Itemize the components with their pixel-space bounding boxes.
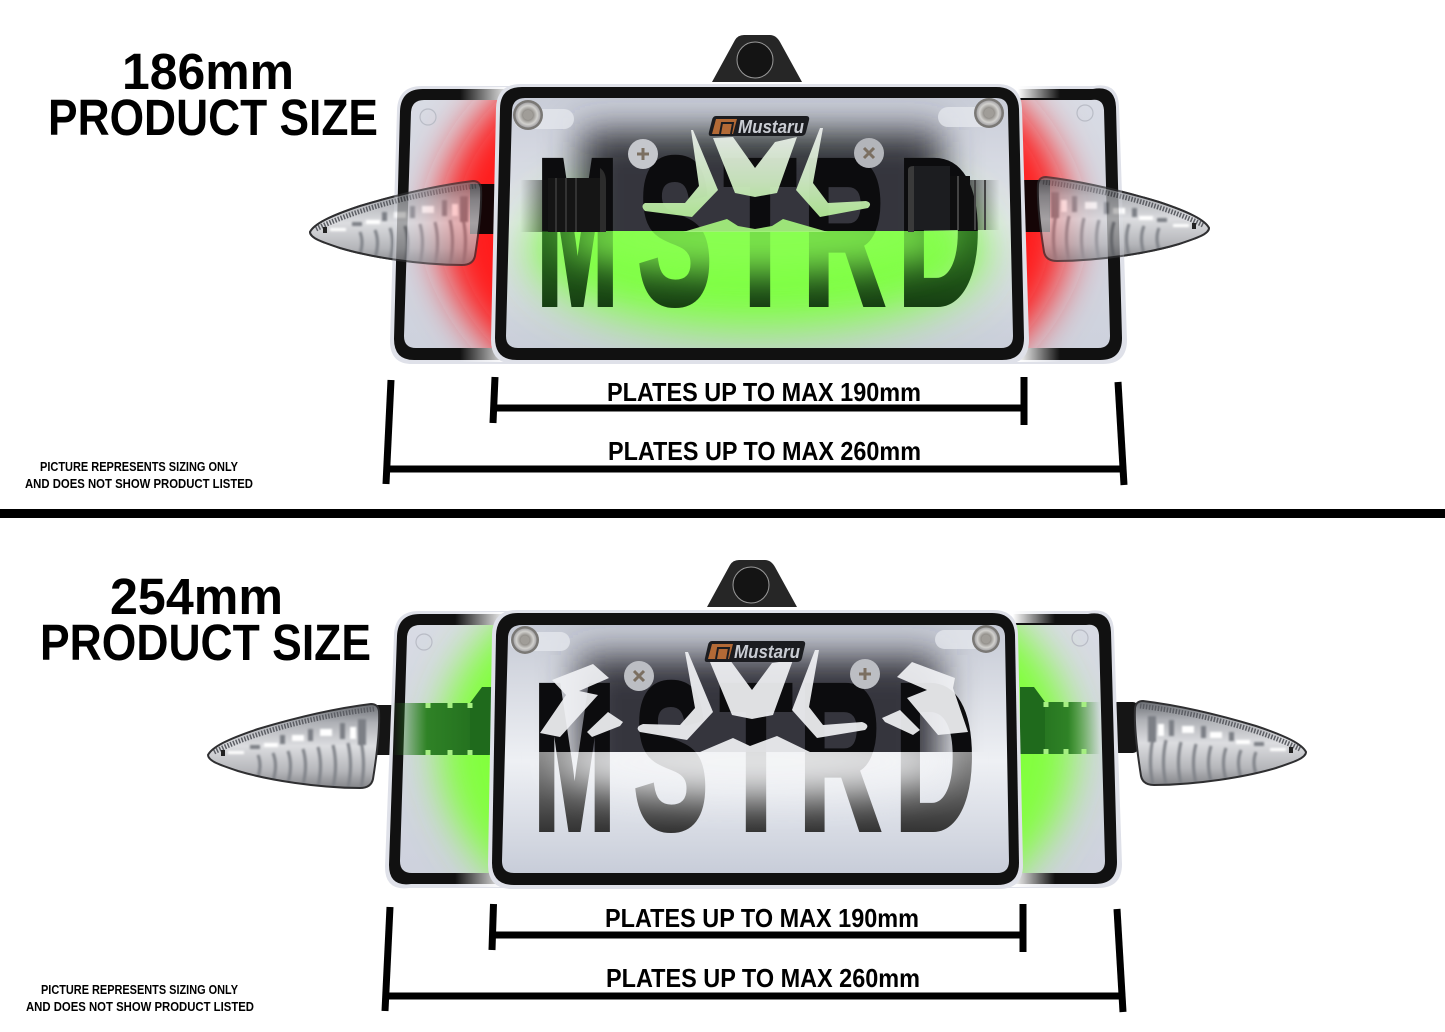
right bracket and grommet	[908, 166, 1000, 232]
MSTRD plate lettering: T	[724, 117, 796, 349]
heading: 254mm product size: 254mm	[110, 568, 283, 625]
MSTRD plate lettering: M	[537, 117, 618, 349]
MSTRD plate lettering: T	[720, 642, 792, 874]
dimension: plates up to 190mm: PLATES UP TO MAX 190mm	[607, 377, 921, 407]
disclaimer note: AND DOES NOT SHOW PRODUCT LISTED	[26, 999, 254, 1014]
dimension: plates up to 260mm: PLATES UP TO MAX 260mm	[608, 436, 921, 466]
MSTRD plate lettering	[539, 680, 972, 833]
MSTRD plate lettering	[542, 154, 978, 308]
right indicator lens and stem	[1112, 701, 1306, 785]
Mustaru logo badge	[705, 641, 805, 662]
dark bracket shadow	[578, 655, 940, 815]
left green grommet through plate	[392, 687, 492, 755]
panel: 254mm product size	[26, 534, 1306, 1014]
rear plate 260mm	[390, 86, 1127, 364]
white wing logo cut-outs	[642, 128, 870, 232]
green glow	[530, 168, 986, 332]
left bracket and grommet	[520, 168, 606, 232]
heading: 254mm product size: PRODUCT SIZE	[40, 614, 371, 671]
front plate 190mm	[488, 610, 1023, 889]
top mounting tab	[707, 560, 797, 607]
heading: 254mm product size	[40, 568, 371, 671]
MSTRD plate lettering: S	[634, 641, 708, 873]
dark bracket shadow	[580, 130, 942, 290]
left indicator outer lens	[310, 181, 481, 265]
left stem and lens seen through plate	[310, 181, 500, 265]
panel: 186mm product size	[25, 10, 1209, 491]
disclaimer note: PICTURE REPRESENTS SIZING ONLY	[40, 459, 238, 474]
heading: 186mm product size: PRODUCT SIZE	[48, 89, 378, 146]
green glow	[406, 625, 1103, 873]
disclaimer note: AND DOES NOT SHOW PRODUCT LISTED	[25, 476, 253, 491]
disclaimer note	[25, 459, 253, 491]
disclaimer note	[26, 982, 254, 1014]
dimension: plates up to 260mm: PLATES UP TO MAX 260mm	[606, 963, 920, 993]
right stem and lens seen through plate	[1020, 177, 1209, 261]
right indicator outer lens	[1038, 177, 1209, 261]
dimension: plates up to 260mm	[385, 907, 1123, 1012]
top mounting tab	[712, 35, 802, 82]
MSTRD plate lettering: S	[638, 116, 712, 348]
MSTRD plate lettering: D	[898, 117, 981, 349]
MSTRD plate lettering: R	[803, 117, 885, 349]
heading: 186mm product size	[48, 43, 378, 146]
MSTRD plate lettering: M	[534, 642, 615, 874]
left indicator lens and stem	[208, 704, 396, 788]
MSTRD plate lettering: R	[799, 642, 881, 874]
Mustaru logo badge	[709, 116, 809, 137]
plate bolts and screws	[513, 98, 1004, 169]
rear plate 260mm	[385, 610, 1122, 888]
heading: 186mm product size: 186mm	[122, 43, 294, 100]
MSTRD plate lettering: D	[895, 642, 975, 874]
white wing logo cut-outs	[540, 650, 968, 752]
right green grommet through plate	[1020, 687, 1100, 754]
pill reflections	[510, 630, 995, 651]
red glow	[409, 100, 1099, 348]
dimension: plates up to 190mm: PLATES UP TO MAX 190mm	[605, 903, 919, 933]
plate bolts and screws	[511, 625, 1000, 691]
dimension: plates up to 260mm	[386, 380, 1124, 485]
Mustaru logo badge: Mustaru	[738, 117, 804, 137]
Mustaru logo badge: Mustaru	[734, 642, 800, 662]
pill reflections	[514, 107, 998, 129]
front plate 190mm	[491, 84, 1029, 364]
disclaimer note: PICTURE REPRESENTS SIZING ONLY	[41, 982, 238, 997]
